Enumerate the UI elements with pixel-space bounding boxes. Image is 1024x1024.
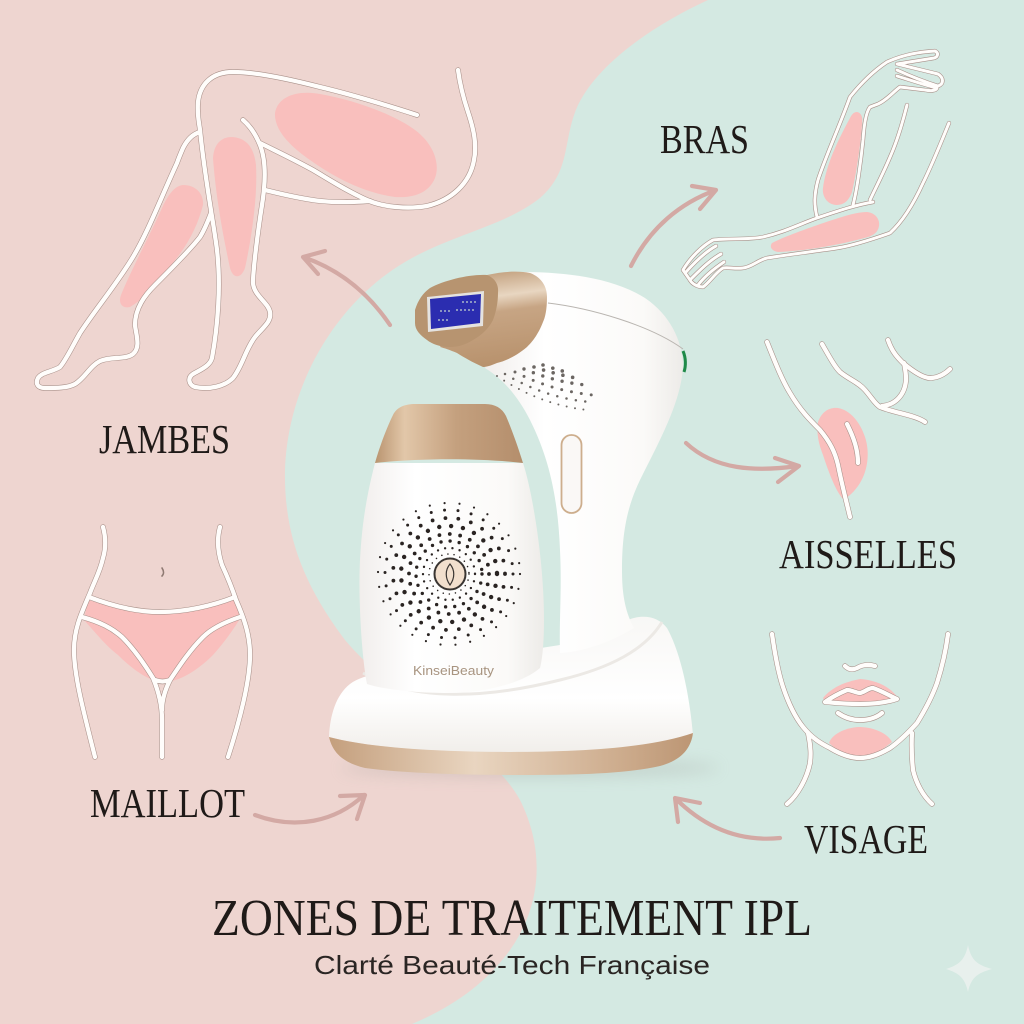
cartridge unit (359, 404, 544, 693)
label: bras: BRAS (660, 116, 749, 162)
lamp window glass (430, 294, 481, 329)
zone: aisselle (817, 408, 868, 499)
zone: bras inferieur (771, 212, 879, 252)
illustration: jambes (37, 70, 475, 388)
arrow: visage (675, 798, 780, 839)
brand name: KinseiBeauty (413, 663, 495, 678)
unit body (359, 463, 544, 693)
handset gold head (440, 272, 547, 367)
gold head face (415, 275, 498, 347)
label: aisselles: AISSELLES (779, 531, 957, 577)
zone: cuisse (275, 93, 437, 197)
illustration: maillot (74, 527, 250, 757)
illustration: visage (772, 634, 948, 804)
label: jambes: JAMBES (99, 416, 230, 462)
base gold rim (329, 733, 693, 775)
zone: maillot (84, 598, 241, 682)
handset vent dots (497, 365, 593, 410)
zone: tibia (213, 137, 256, 276)
zone: avant-bras (823, 112, 862, 205)
device: IPL set (329, 272, 720, 776)
charging base (329, 617, 693, 775)
illustration: aisselles (767, 340, 950, 517)
indicator light (683, 351, 685, 372)
arrow: maillot (255, 795, 365, 822)
background: pink wave (0, 0, 708, 1024)
handset (415, 272, 685, 653)
label: visage: VISAGE (804, 816, 928, 862)
base cradle seam (363, 622, 662, 694)
handset button (562, 435, 582, 513)
speaker dot rings (378, 503, 520, 645)
navel (162, 568, 164, 576)
center button (434, 558, 466, 590)
zone: mollet (120, 185, 203, 307)
arrow: bras (631, 186, 716, 266)
icon: sparkle (946, 945, 992, 992)
title: ZONES DE TRAITEMENT IPL (212, 890, 812, 947)
arrow: aisselles (686, 443, 799, 482)
base shadow (340, 760, 720, 776)
unit gold cap (375, 404, 523, 463)
lamp window (427, 291, 484, 332)
illustration: bras (683, 51, 949, 287)
zone: levres (823, 679, 898, 704)
arrow: jambes (303, 251, 390, 325)
subtitle: Clarté Beauté-Tech Française (314, 950, 710, 980)
zone: menton (829, 727, 892, 757)
label: maillot: MAILLOT (90, 780, 245, 826)
handset body (485, 272, 683, 653)
handset seam (548, 303, 683, 349)
